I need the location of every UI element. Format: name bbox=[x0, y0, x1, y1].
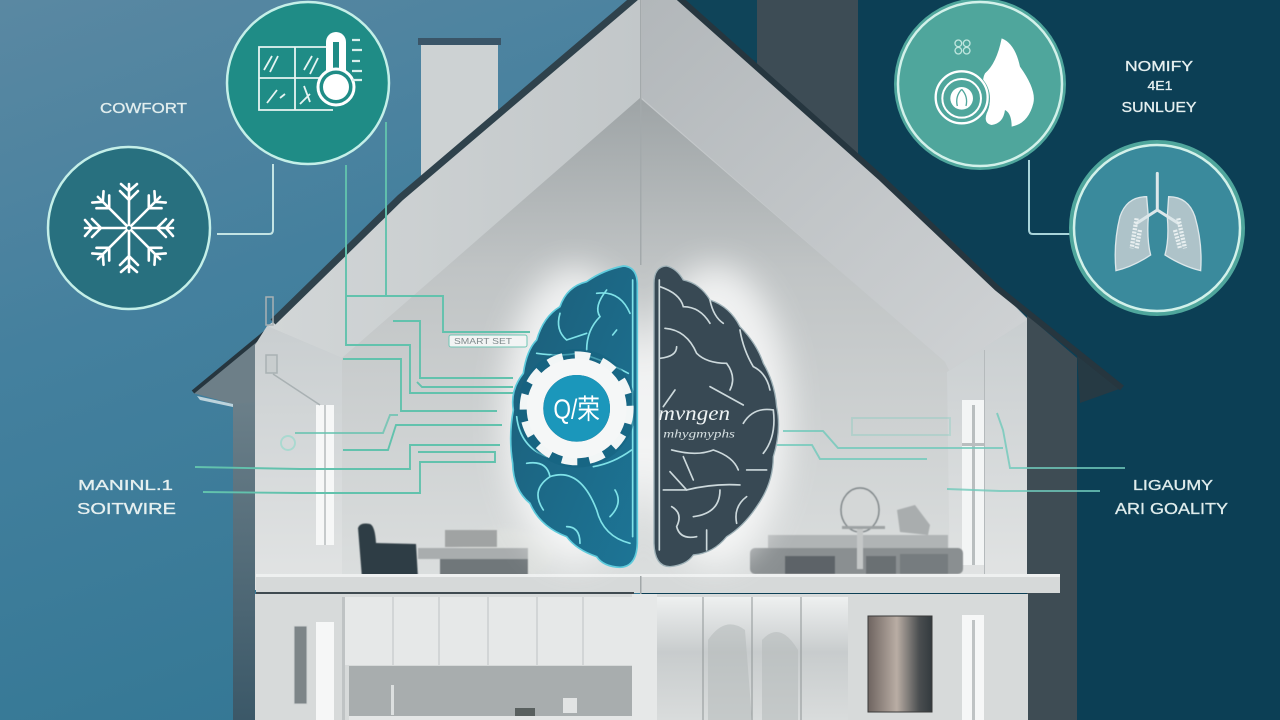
gyri bbox=[659, 280, 774, 550]
chair bbox=[358, 524, 418, 578]
furniture: upper floor left bbox=[358, 524, 553, 581]
connector: flame to lungs bbox=[1029, 160, 1072, 234]
roof edge: left bbox=[273, 0, 636, 322]
backsplash bbox=[349, 666, 632, 716]
glass doors bbox=[657, 597, 848, 720]
lamp bbox=[841, 488, 885, 569]
wires: right bbox=[777, 413, 1125, 491]
lower right window bbox=[962, 615, 984, 720]
icon circle: thermostat window bbox=[227, 2, 389, 164]
furniture: upper floor right bbox=[750, 488, 963, 574]
gear: Q/荣 bbox=[553, 393, 600, 424]
label: bottom left: MANINL.1 bbox=[78, 477, 173, 494]
brain: right hemisphere bbox=[654, 266, 779, 567]
gyri bbox=[517, 280, 633, 543]
left window bbox=[316, 405, 334, 545]
label: bottom left bbox=[77, 477, 176, 518]
connector: snowflake to thermostat bbox=[217, 164, 273, 234]
label: top right: SUNLUEY bbox=[1122, 99, 1196, 116]
label: bottom left: SOITWIRE bbox=[77, 501, 176, 518]
roof edge: right bbox=[678, 0, 1122, 388]
interior wall bbox=[342, 98, 950, 590]
lower left window bbox=[316, 622, 334, 720]
scribble text bbox=[658, 403, 735, 440]
kitchen cabinets bbox=[345, 597, 632, 665]
label: bottom right: ARI GOALITY bbox=[1115, 501, 1228, 518]
roof underside right bbox=[642, 0, 1027, 372]
label: top right bbox=[1122, 58, 1196, 116]
roof underside left bbox=[267, 0, 640, 358]
left wall art bbox=[294, 626, 307, 704]
house base bbox=[255, 0, 1027, 590]
chimney: right bbox=[757, 0, 858, 190]
label: comfort: COWFORT bbox=[100, 100, 187, 117]
chimney: left bbox=[418, 38, 501, 182]
scribble text: mhygmyphs bbox=[663, 426, 735, 440]
thermometer bbox=[318, 32, 362, 105]
brain: left hemisphere bbox=[511, 266, 637, 567]
house bbox=[193, 0, 1122, 720]
right window bbox=[962, 400, 984, 565]
scribble text: mvngen bbox=[658, 403, 730, 425]
left side wall bbox=[255, 326, 342, 590]
label: top right: NOMIFY bbox=[1125, 58, 1193, 75]
gear bbox=[517, 349, 636, 468]
label tag: SMART SET bbox=[454, 337, 512, 346]
label: bottom right: LIGAUMY bbox=[1133, 477, 1213, 494]
counter bbox=[349, 716, 632, 720]
dark side walls bbox=[193, 315, 1122, 720]
upper floor slab bbox=[256, 574, 1060, 594]
brain glow bbox=[503, 265, 790, 565]
icon circle: lungs bbox=[1071, 142, 1243, 314]
right side wall bbox=[947, 320, 1027, 590]
label tag bbox=[449, 335, 527, 347]
eave edge: left bbox=[193, 331, 267, 392]
wall devices bbox=[266, 297, 320, 405]
icon circle: snowflake bbox=[48, 147, 210, 309]
label: top right: 4E1 bbox=[1148, 78, 1172, 93]
wall art bbox=[868, 616, 932, 712]
lower floor bbox=[255, 594, 1028, 720]
label: bottom right bbox=[1115, 477, 1228, 518]
wires: left bbox=[195, 122, 530, 493]
icon circle: flame bbox=[894, 0, 1066, 170]
faucet bbox=[391, 685, 577, 716]
